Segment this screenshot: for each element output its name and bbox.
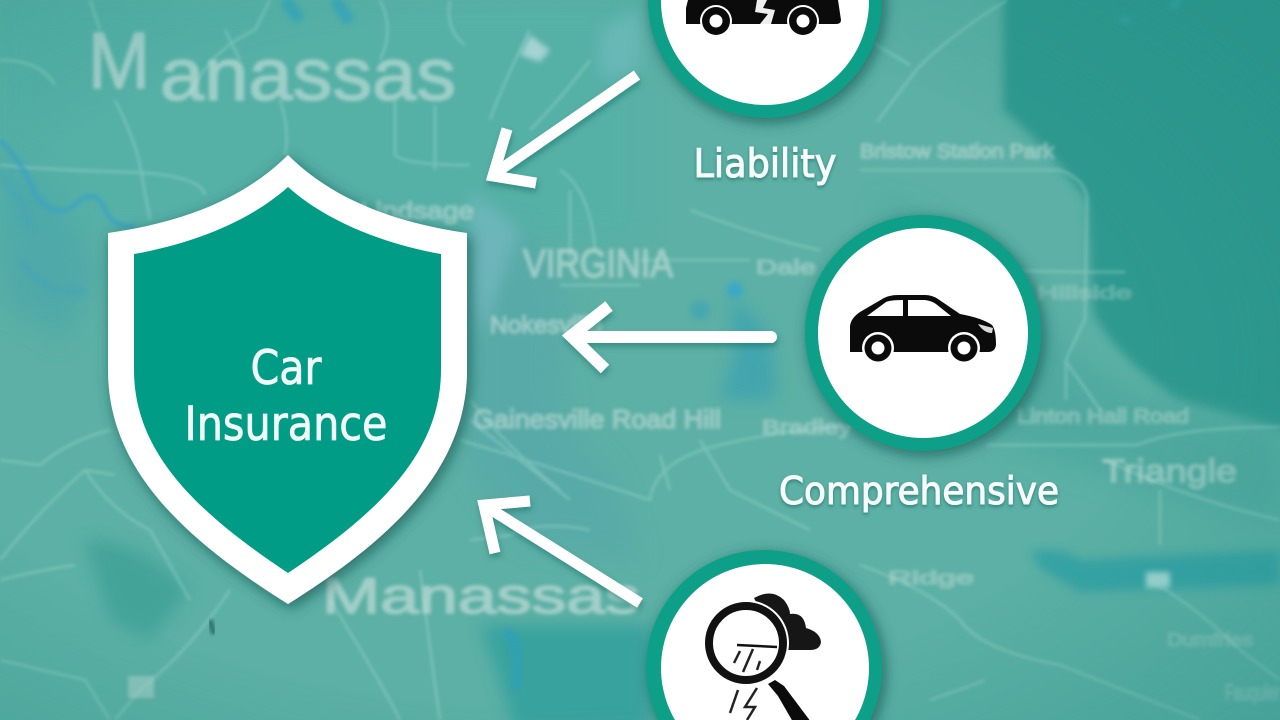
icon: colliding vehicles bbox=[686, 0, 841, 37]
comprehensive circle bbox=[805, 215, 1041, 451]
blurred map labels: Dale bbox=[756, 257, 816, 279]
blurred map labels: Gainesville Road Hill bbox=[473, 404, 721, 434]
liability circle bbox=[648, 0, 882, 118]
blurred map labels: Hillside bbox=[1037, 283, 1132, 303]
blurred map labels: anassas bbox=[160, 33, 456, 116]
shield label bbox=[184, 341, 388, 452]
icon: car bbox=[850, 295, 996, 364]
blurred map labels: Bristow Station Park bbox=[860, 141, 1055, 163]
arrow: comprehensive to shield bbox=[571, 306, 771, 369]
shield: Car Insurance bbox=[108, 155, 467, 604]
blurred map labels: Bradley bbox=[762, 417, 852, 439]
blurred map labels: Linton Hall Road bbox=[1017, 406, 1189, 428]
blurred map labels: Ridge bbox=[888, 568, 974, 588]
arrow: weather to shield bbox=[484, 501, 640, 603]
blurred map labels: Dumfries bbox=[1167, 630, 1253, 650]
blurred map labels: Nokesville bbox=[490, 312, 602, 339]
blurred map labels: Triangle bbox=[1102, 453, 1237, 489]
shield label: Car bbox=[250, 341, 322, 396]
arrow: liability to shield bbox=[493, 75, 637, 183]
label: Liability: Liability bbox=[694, 142, 836, 187]
shield label: Insurance bbox=[184, 397, 388, 452]
icon: magnifier over storm cloud bbox=[709, 593, 821, 720]
blurred map labels: Manassas bbox=[322, 568, 640, 624]
blurred map labels: Lindsage bbox=[360, 198, 474, 225]
blurred map labels: M bbox=[88, 16, 150, 105]
blurred map labels: VIRGINIA bbox=[523, 242, 673, 286]
water bbox=[0, 150, 100, 340]
label: Comprehensive: Comprehensive bbox=[779, 469, 1059, 513]
weather circle bbox=[646, 550, 882, 720]
